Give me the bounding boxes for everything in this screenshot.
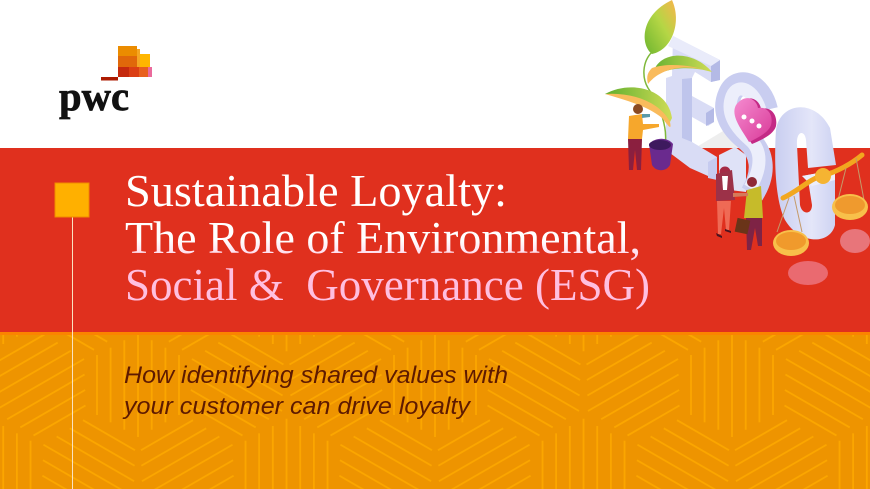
- illustration: ESG letters with plant, people and scales: [605, 0, 870, 285]
- icon: man with briefcase: [733, 177, 763, 250]
- icon: woman shaking hands: [716, 166, 735, 238]
- title: [125, 165, 650, 310]
- icon: letter G: [775, 107, 836, 239]
- subtitle: [122, 362, 508, 420]
- icon: plant: [605, 0, 712, 145]
- icon: plant pot: [649, 139, 673, 170]
- icon: letter S: [719, 84, 766, 194]
- yellow square marker: [55, 183, 89, 217]
- icon: heart speech bubble: [734, 98, 776, 144]
- subtitle: How identifying shared values with: [124, 362, 508, 389]
- icon: balance scales: [773, 155, 868, 256]
- PwC logo: [59, 46, 152, 119]
- title: Sustainable Loyalty:: [125, 165, 507, 216]
- subtitle: your customer can drive loyalty: [122, 393, 472, 420]
- icon: ground shadows: [695, 128, 870, 285]
- orange patterned band: [0, 332, 870, 489]
- red title band: [0, 148, 870, 332]
- logo wordmark: pwc: [59, 73, 129, 119]
- icon: letter E: [666, 36, 720, 180]
- vertical guide line: [72, 217, 73, 489]
- icon: person watering plant: [628, 104, 659, 170]
- title: Social & Governance (ESG): [125, 259, 650, 310]
- title: The Role of Environmental,: [125, 212, 641, 263]
